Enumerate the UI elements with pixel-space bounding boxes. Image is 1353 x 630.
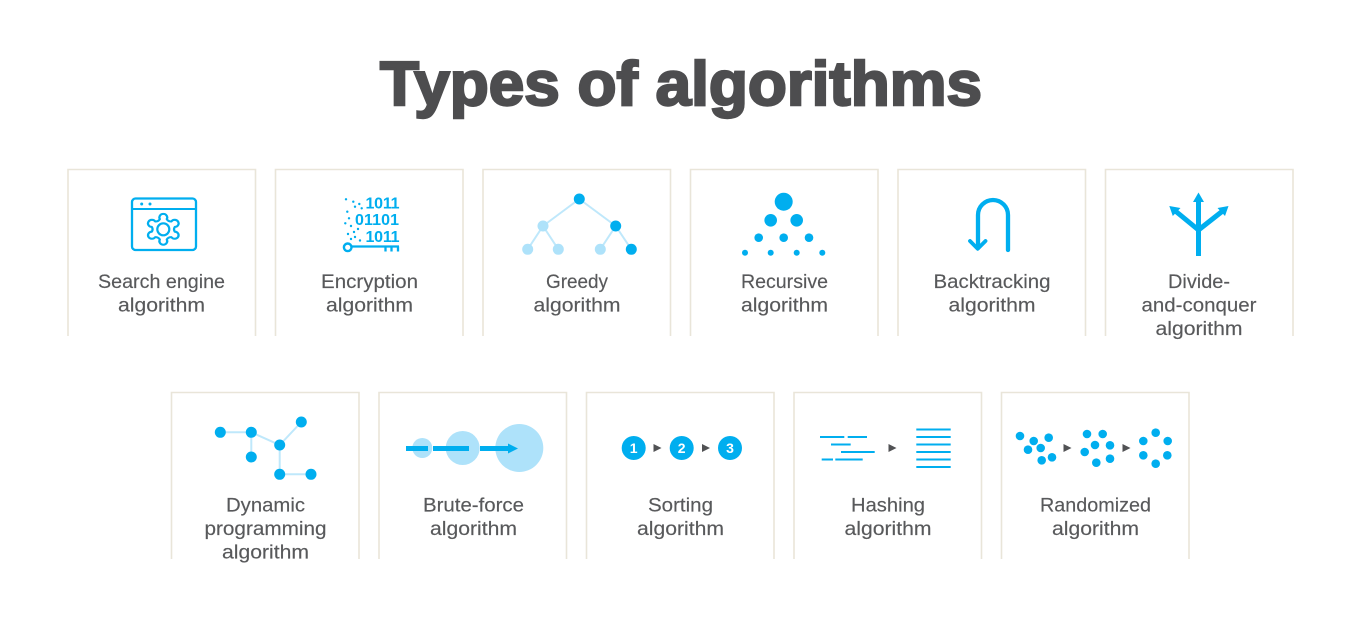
label: brute-force algorithm: Brute-force bbox=[423, 494, 524, 516]
label: dynamic programming algorithm: algorithm bbox=[222, 542, 309, 564]
label: recursive algorithm: Recursive bbox=[741, 271, 828, 293]
icon: binary digits and key: 1011 bbox=[366, 229, 400, 246]
icon: scattered lines to ordered lines bbox=[820, 430, 951, 467]
label: sorting algorithm: algorithm bbox=[637, 518, 724, 540]
panel: backtracking algorithm bbox=[898, 170, 1086, 336]
label: backtracking algorithm: Backtracking bbox=[934, 271, 1050, 293]
label: randomized algorithm: Randomized bbox=[1040, 494, 1151, 516]
label: dynamic programming algorithm: Dynamic bbox=[226, 494, 305, 516]
panel: search engine algorithm bbox=[68, 170, 256, 336]
icon: numbered sequence: 2 bbox=[678, 440, 686, 456]
icon: dots becoming ordered bbox=[1016, 428, 1172, 468]
panel: divide-and-conquer algorithm bbox=[1106, 170, 1293, 340]
icon: arrow through growing circles bbox=[406, 424, 543, 472]
icon: node graph bbox=[215, 416, 316, 480]
icon: browser window with gear bbox=[132, 198, 196, 250]
icon: dot pyramid bbox=[742, 193, 825, 256]
label: hashing algorithm: Hashing bbox=[851, 494, 925, 516]
panel: greedy algorithm bbox=[483, 170, 670, 336]
label: sorting algorithm: Sorting bbox=[648, 494, 713, 516]
label: encryption algorithm: algorithm bbox=[326, 294, 413, 316]
label: encryption algorithm: Encryption bbox=[321, 271, 418, 293]
label: greedy algorithm: algorithm bbox=[534, 294, 620, 316]
label: divide-and-conquer algorithm: and-conquer bbox=[1142, 294, 1257, 316]
label: divide-and-conquer algorithm: Divide- bbox=[1168, 271, 1230, 293]
icon: binary tree with highlighted path bbox=[522, 194, 637, 255]
icon: binary digits and key: 1011 bbox=[366, 196, 400, 212]
label: recursive algorithm: algorithm bbox=[741, 294, 828, 316]
icon: binary digits and key bbox=[344, 196, 400, 252]
panel: dynamic programming algorithm bbox=[172, 392, 359, 564]
icon: numbered sequence bbox=[622, 436, 742, 460]
panel: randomized algorithm bbox=[1002, 392, 1189, 559]
panel: brute-force algorithm bbox=[379, 392, 566, 559]
icon: numbered sequence: 3 bbox=[726, 440, 734, 456]
label: hashing algorithm: algorithm bbox=[844, 518, 932, 540]
title: Types of algorithms bbox=[380, 50, 982, 119]
label: randomized algorithm: algorithm bbox=[1052, 518, 1139, 540]
panel: sorting algorithm bbox=[586, 392, 774, 559]
label: brute-force algorithm: algorithm bbox=[430, 518, 517, 540]
icon: three-way branching arrow bbox=[1169, 192, 1228, 256]
icon: U-turn arrow bbox=[970, 200, 1008, 250]
icon: binary digits and key: 01101 bbox=[355, 212, 399, 229]
label: dynamic programming algorithm: programming bbox=[204, 518, 326, 540]
label: search engine algorithm: Search engine bbox=[98, 271, 225, 293]
panel: encryption algorithm bbox=[276, 170, 463, 336]
panel: hashing algorithm bbox=[794, 392, 982, 559]
icon: numbered sequence: 1 bbox=[630, 440, 638, 456]
label: divide-and-conquer algorithm: algorithm bbox=[1156, 318, 1242, 340]
label: backtracking algorithm: algorithm bbox=[948, 294, 1036, 316]
panel: recursive algorithm bbox=[690, 170, 878, 336]
label: greedy algorithm: Greedy bbox=[546, 271, 608, 293]
label: search engine algorithm: algorithm bbox=[118, 294, 205, 316]
